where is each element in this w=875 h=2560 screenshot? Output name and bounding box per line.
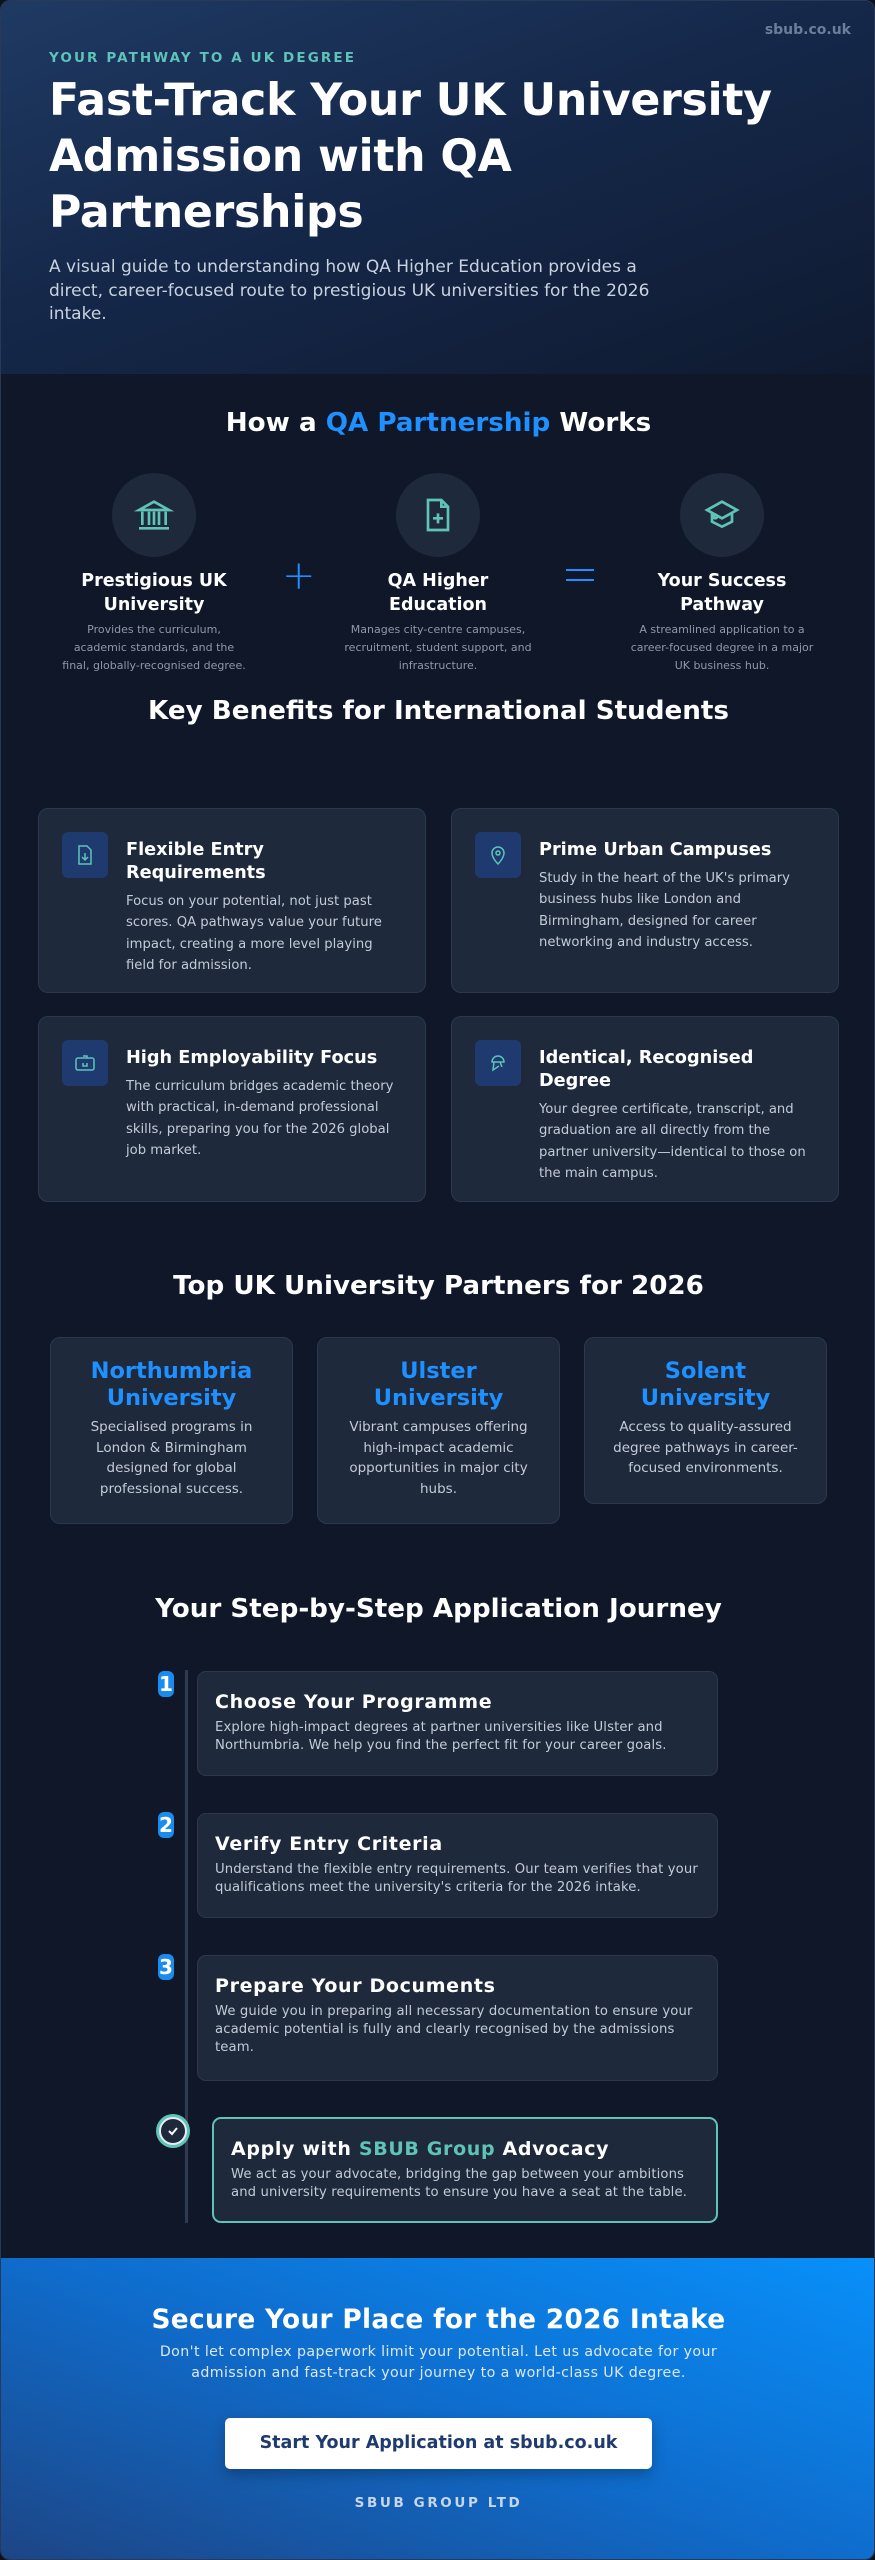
card: flexible entry: Flexible Entry Requirements	[126, 840, 266, 883]
step 2 card: qualifications meet the university's criteria for the 2026 intake.	[215, 1880, 641, 1895]
icon: graduation cap	[680, 473, 764, 557]
step 3 card: team.	[215, 2040, 254, 2055]
partner: Ulster	[317, 1337, 560, 1524]
item: success: A streamlined application to a	[639, 623, 805, 636]
partner: Northumbria	[50, 1337, 293, 1524]
CTA text: Don't let complex paperwork limit your potential. Let us advocate for your admission and fast-track your journey to a world-class UK degree.	[160, 2344, 717, 2380]
step 2 card: Verify Entry Criteria	[215, 1833, 443, 1855]
partner: Northumbria: Northumbria University	[91, 1358, 252, 1411]
step 1 badge: 1	[159, 1672, 173, 1696]
item: QA: Education	[389, 594, 487, 614]
step 3 card: Prepare Your Documents	[215, 1975, 496, 1997]
card: identical degree: Your degree certificate, transcript, and graduation are all directly from the partner university—identical to those on the main campus.	[539, 1102, 806, 1181]
card: urban campuses: Prime Urban Campuses	[539, 840, 771, 860]
step 2 card	[197, 1813, 718, 1918]
card: urban campuses: Study in the heart of the UK's primary business hubs like London and Birmingham, designed for career networking and industry access.	[539, 871, 790, 950]
item: university: University	[104, 594, 204, 614]
CTA button	[225, 2418, 652, 2469]
step 1 card: Choose Your Programme	[215, 1691, 492, 1713]
title: Fast-Track Your UK University	[49, 75, 772, 126]
card: identical degree	[451, 1016, 839, 1202]
plus sign: +	[282, 553, 316, 599]
item: success: Your Success	[658, 571, 786, 591]
partner: Solent: Access to quality-assured degree pathways in career-focused environments.	[613, 1419, 798, 1476]
card: employability: The curriculum bridges academic theory with practical, in-demand professional skills, preparing you for the 2026 global job market.	[126, 1079, 393, 1158]
step 3 badge: 3	[159, 1955, 173, 1979]
footer brand: SBUB GROUP LTD	[355, 2495, 522, 2511]
title	[49, 75, 772, 238]
partner: Solent	[584, 1337, 827, 1504]
card: flexible entry: Focus on your potential, not just past scores. QA pathways value your future impact, creating a more level playing field for admission.	[126, 894, 382, 973]
step 4 card: We act as your advocate, bridging the gap between your ambitions	[231, 2167, 684, 2182]
step 2 badge: 2	[159, 1813, 173, 1837]
step 1 card	[197, 1671, 718, 1776]
card: identical degree: Identical, Recognised Degree	[539, 1048, 753, 1091]
item: QA: QA Higher	[388, 571, 488, 591]
heading: partners: Top UK University Partners for 2026	[173, 1271, 704, 1301]
card: employability	[38, 1016, 426, 1202]
item: university: Provides the curriculum,	[87, 623, 221, 636]
heading: application journey: Your Step-by-Step Application Journey	[155, 1594, 722, 1624]
heading: how partnership works: How a QA Partnership Works	[226, 408, 651, 438]
title: Partnerships	[49, 187, 363, 238]
item: QA: Manages city-centre campuses,	[351, 623, 525, 636]
step 1 card: Northumbria. We help you find the perfect fit for your career goals.	[215, 1738, 667, 1753]
partnership equation	[62, 473, 814, 672]
CTA panel	[1, 2258, 875, 2560]
item: university: academic standards, and the	[74, 641, 234, 654]
header panel	[1, 1, 875, 374]
card: urban campuses	[451, 808, 839, 993]
item: QA: recruitment, student support, and	[344, 641, 532, 654]
step 4 card	[212, 2117, 718, 2223]
CTA heading: Secure Your Place for the 2026 Intake	[152, 2304, 726, 2335]
icon: seal	[475, 1040, 521, 1086]
icon: file download	[62, 832, 108, 878]
item: success: UK business hub.	[675, 659, 769, 672]
CTA button: Start Your Application at sbub.co.uk	[260, 2433, 617, 2453]
step 2 card: Understand the flexible entry requirements. Our team verifies that your	[215, 1862, 698, 1877]
item: success: Pathway	[680, 594, 764, 614]
step 4 card: Apply with SBUB Group Advocacy	[231, 2138, 609, 2160]
item: university: final, globally-recognised degree.	[62, 659, 246, 672]
icon: university building	[112, 473, 196, 557]
timeline line	[185, 1670, 188, 2223]
step 4 card: and university requirements to ensure you have a seat at the table.	[231, 2185, 687, 2200]
heading: key benefits: Key Benefits for International Students	[148, 696, 729, 726]
item: QA: infrastructure.	[399, 659, 477, 672]
partner: Ulster: Ulster University	[374, 1358, 503, 1411]
icon: briefcase	[62, 1040, 108, 1086]
site url: sbub.co.uk	[765, 22, 851, 38]
timeline	[185, 1670, 188, 2223]
step 3 card: We guide you in preparing all necessary documentation to ensure your	[215, 2004, 692, 2019]
step 3 card	[197, 1955, 718, 2081]
card: employability: High Employability Focus	[126, 1048, 377, 1068]
item: university: Prestigious UK	[81, 571, 227, 591]
card: flexible entry	[38, 808, 426, 993]
item: success: career-focused degree in a major	[631, 641, 813, 654]
eyebrow: YOUR PATHWAY TO A UK DEGREE	[49, 50, 356, 66]
title: Admission with QA	[49, 131, 512, 182]
equals sign	[566, 569, 594, 581]
partner: Solent: Solent University	[641, 1358, 770, 1411]
subtitle: A visual guide to understanding how QA Higher Education provides a direct, career-focused route to prestigious UK universities for the 2026 intake.	[49, 257, 649, 324]
item: QA	[344, 473, 532, 672]
step 3 card: academic potential is fully and clearly recognised by the admissions	[215, 2022, 674, 2037]
icon: map pin	[475, 832, 521, 878]
icon: document plus	[396, 473, 480, 557]
step 1 card: Explore high-impact degrees at partner universities like Ulster and	[215, 1720, 663, 1735]
icon: check circle	[156, 2114, 190, 2148]
item: university	[62, 473, 246, 672]
partner: Northumbria: Specialised programs in London & Birmingham designed for global professional success.	[91, 1419, 252, 1497]
item: success	[631, 473, 814, 672]
partner: Ulster: Vibrant campuses offering high-impact academic opportunities in major city hubs.	[349, 1419, 528, 1497]
